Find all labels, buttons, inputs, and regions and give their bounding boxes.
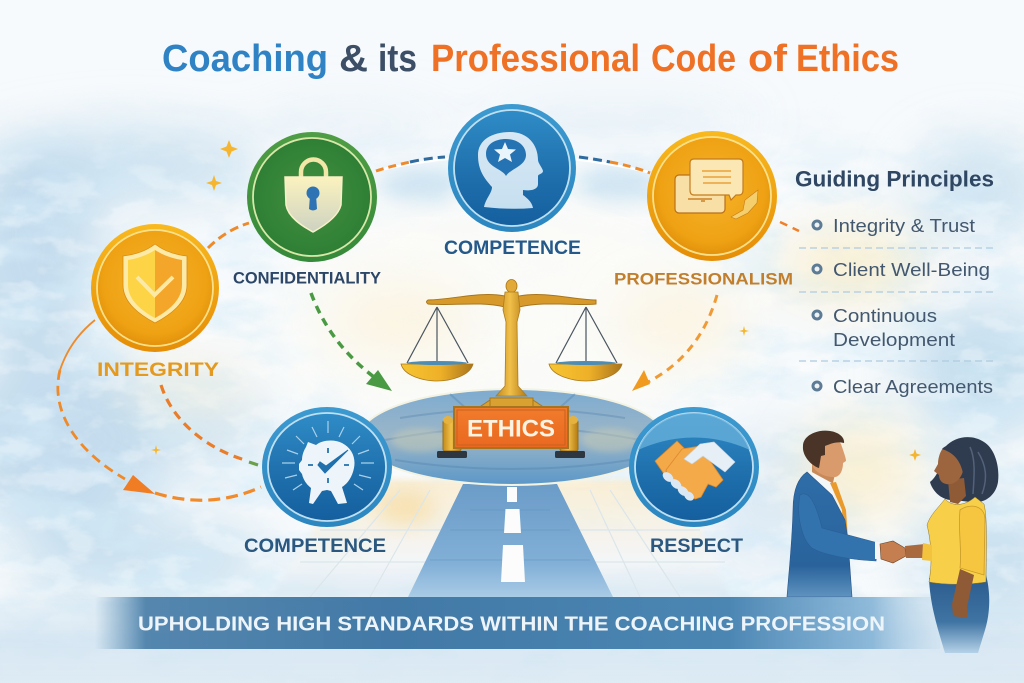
title: Professional — [431, 38, 640, 80]
label: professionalism: PROFESSIONALISM — [614, 270, 793, 288]
list text: Development — [833, 329, 955, 350]
base — [478, 398, 545, 408]
lower arc to competence — [155, 487, 261, 500]
ethics plaque: ETHICS — [467, 416, 555, 442]
right pan strings — [556, 307, 617, 363]
arrowhead: orange left — [123, 475, 155, 494]
label: competence bottom: COMPETENCE — [244, 536, 386, 557]
arm — [799, 494, 878, 561]
arc: integrity to confidentiality — [208, 223, 249, 248]
title: Ethics — [796, 38, 899, 80]
dashed connectors — [58, 157, 799, 500]
circular platform — [360, 389, 664, 485]
title — [162, 38, 899, 80]
floor tiles — [270, 480, 730, 597]
neck and head — [812, 462, 836, 487]
title: & — [339, 38, 368, 80]
banner: UPHOLDING HIGH STANDARDS WITHIN THE COACHING PROFESSION — [138, 612, 885, 636]
jeans — [929, 575, 989, 653]
right foot — [555, 416, 585, 458]
figure: man in suit — [787, 431, 906, 597]
badge: professionalism — [647, 131, 777, 261]
left pan strings — [407, 307, 468, 363]
arc: competence to professionalism — [579, 157, 610, 162]
forearm reaching — [905, 544, 925, 558]
orange arrow: professionalism to scale — [648, 295, 717, 382]
left foot — [437, 416, 467, 458]
right pan — [549, 364, 622, 381]
title: its — [378, 38, 417, 80]
shirt and tie — [808, 470, 840, 530]
badge: competence bottom — [262, 407, 392, 527]
badge: respect — [629, 407, 759, 527]
figure: woman in yellow — [905, 437, 998, 653]
inner arc: integrity to competence — [161, 385, 245, 460]
ethics plaque — [454, 407, 568, 448]
banner — [95, 597, 940, 649]
label: integrity: INTEGRITY — [97, 359, 219, 381]
fringe — [942, 444, 970, 478]
soft white centre — [275, 185, 745, 455]
torso — [927, 497, 986, 584]
left pan — [401, 364, 473, 381]
dividers — [799, 248, 994, 361]
icon: clock medal with check — [282, 421, 374, 504]
label: confidentiality: CONFIDENTIALITY — [233, 270, 381, 288]
label: competence top: COMPETENCE — [444, 238, 581, 259]
heading: Guiding Principles — [795, 166, 994, 192]
knob and post — [506, 280, 517, 292]
neck — [948, 478, 966, 504]
beam — [426, 294, 596, 307]
badge: integrity — [91, 224, 219, 352]
icon: speech bubbles — [675, 159, 758, 219]
central dome backdrop — [378, 155, 662, 201]
green arrow: confidentiality to scale — [311, 293, 378, 380]
badge: confidentiality — [247, 132, 377, 262]
title: Coaching — [162, 38, 328, 80]
arc: confidentiality to competence — [376, 162, 410, 171]
list text: Client Well-Being — [833, 259, 990, 280]
sleeve — [922, 543, 932, 561]
link: professionalism to guiding principles — [780, 222, 799, 231]
badge: competence top — [448, 104, 576, 232]
list text: Clear Agreements — [833, 376, 993, 397]
panel: guiding principles — [795, 166, 994, 397]
icon: head with star — [478, 132, 543, 209]
arrowhead: green — [366, 370, 392, 391]
title: Code — [651, 38, 736, 80]
lower arm — [952, 569, 974, 618]
outer arc: integrity round to arrow — [60, 320, 95, 370]
road centre dashes — [501, 487, 525, 582]
icon: shield — [123, 244, 187, 323]
list text: Continuous — [833, 305, 937, 326]
road — [408, 484, 613, 597]
icon: balance scale — [401, 280, 622, 458]
arrowhead: orange right — [632, 370, 650, 391]
face — [934, 446, 964, 484]
icon: padlock — [285, 159, 342, 232]
list text — [833, 215, 993, 397]
suit — [787, 472, 852, 597]
label: respect: RESPECT — [650, 536, 743, 557]
title: of — [748, 38, 787, 80]
icon: handshake — [655, 441, 735, 503]
hands — [880, 541, 906, 563]
list text: Integrity & Trust — [833, 215, 975, 236]
list bullets — [813, 221, 821, 390]
hair — [930, 437, 998, 502]
sparkle stars — [151, 140, 921, 461]
